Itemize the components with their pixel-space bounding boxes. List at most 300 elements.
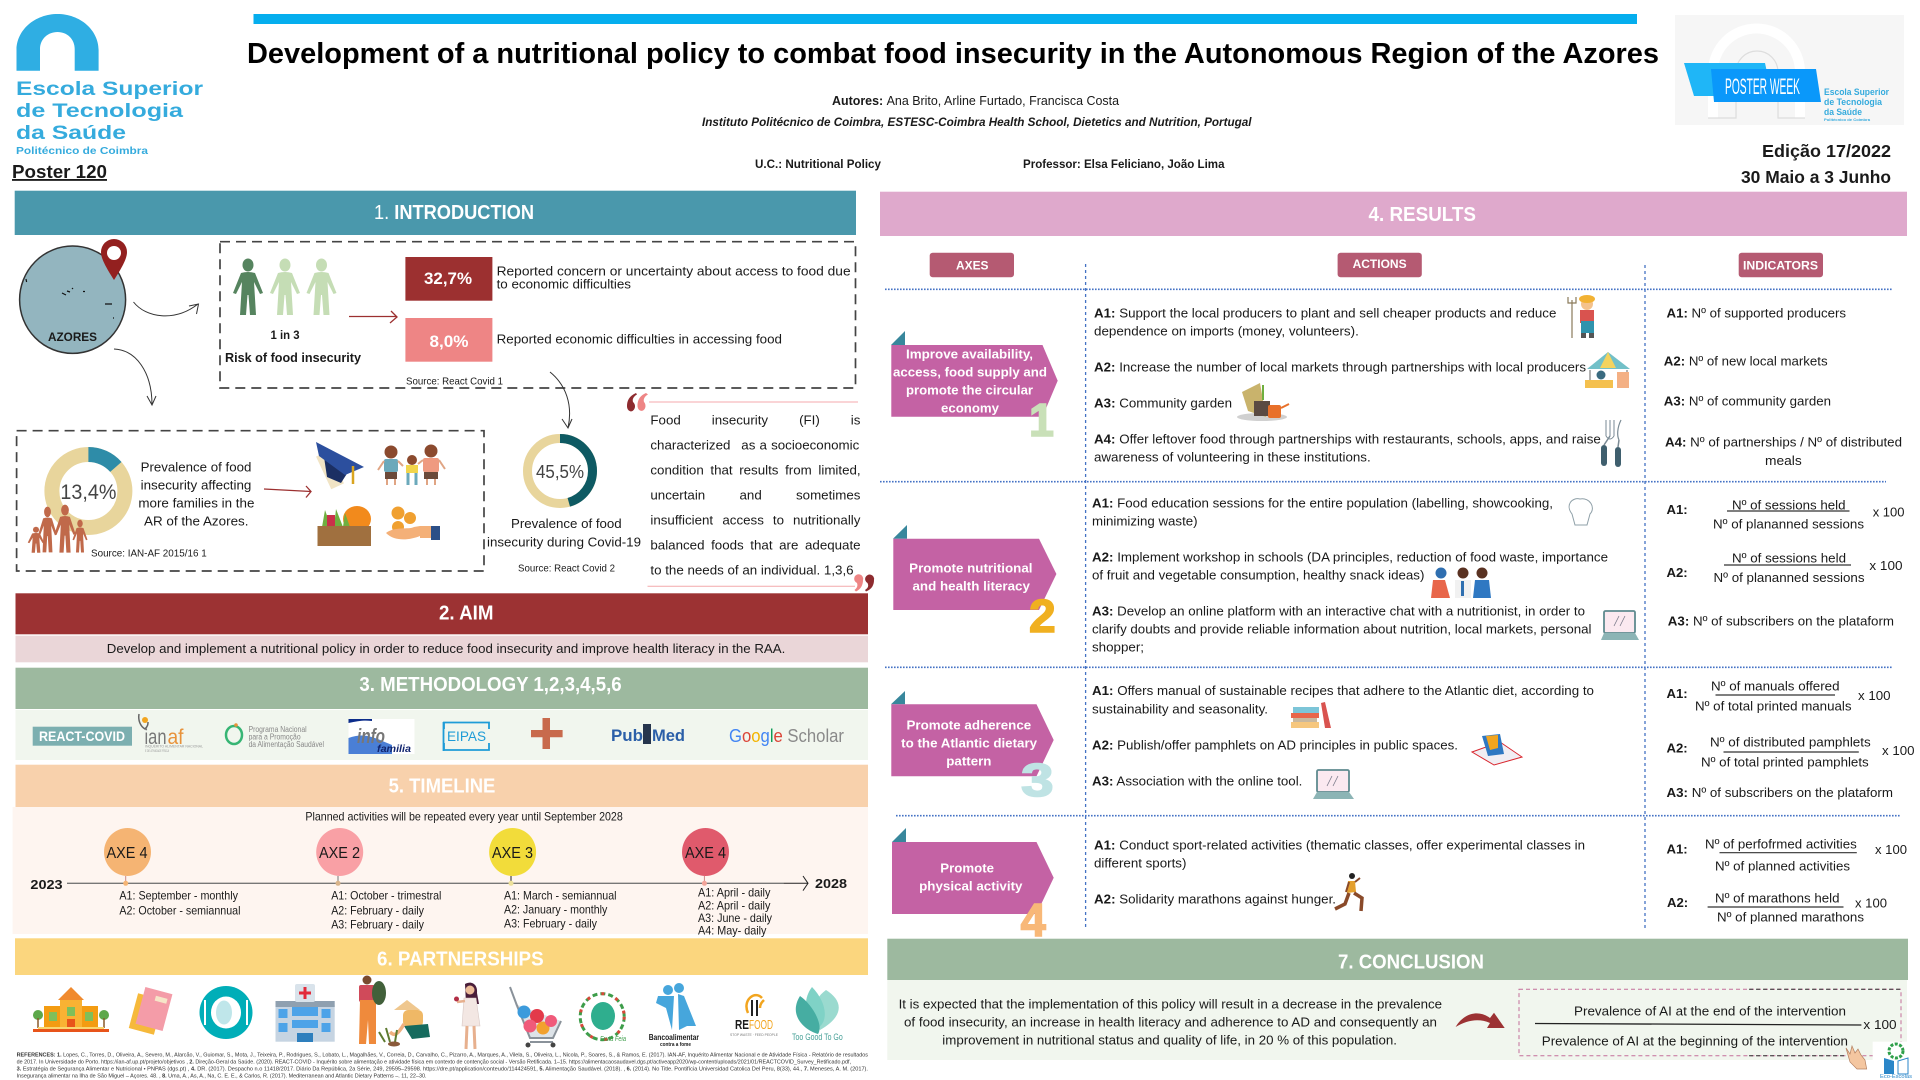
references: Insegurança alimentar na Ilha de São Miguel – Açores. 48. , 8. Uma, A., As, A., Na, C. E. E., & Carlos, R. (2017). Mediterranean and Atlantic Dietary Patterns –. 11, 22–30.: [17, 1073, 427, 1079]
source: Source: React Covid 2: [518, 562, 615, 574]
poster week logo: da Saúde: [1824, 107, 1862, 117]
logo: Refood: STOP WASTE · FEED PEOPLE: [730, 1032, 778, 1037]
heading: results: [880, 192, 1907, 236]
axis 3: [891, 691, 1054, 806]
milestone: AXE 4: [104, 828, 240, 918]
axis flag: [893, 525, 907, 539]
school logo: de Tecnologia: [16, 100, 183, 122]
axis flag: [892, 828, 906, 842]
panel: results: [880, 192, 1914, 946]
formula: activities: x 100: [1875, 842, 1907, 857]
formula: marathons: x 100: [1855, 896, 1887, 910]
donut: 45,5%: [528, 438, 592, 504]
axis label: Promote: [940, 860, 994, 876]
logo: national food programme: Programa Nacional: [249, 725, 307, 734]
aim statement: [16, 636, 868, 662]
quote: definition of food insecurity: uncertain: [650, 488, 705, 502]
quote: definition of food insecurity: condition: [650, 462, 704, 478]
milestone: AXE 3: [489, 828, 616, 930]
arrow: risk box to Covid donut: [550, 372, 572, 428]
formula: sessions A1: Nº of sessions held: [1732, 498, 1846, 512]
icon: nutritionist: [454, 983, 480, 1049]
icon: one in three people: [233, 258, 336, 315]
text: prevalence during Covid-19: Prevalence of food: [511, 516, 622, 531]
poster week logo: [1675, 15, 1904, 125]
authors: Autores: Ana Brito, Arline Furtado, Francisca Costa: [832, 94, 1119, 108]
quote: definition of food insecurity: balanced: [650, 538, 705, 552]
axis number: 2: [1029, 590, 1056, 642]
conclusion text: of food insecurity, an increase in health literacy and adherence to AD and consequently an: [904, 1014, 1437, 1030]
heading: aim: 2. AIM: [439, 602, 494, 624]
map of the Azores with pin: [20, 239, 127, 353]
axis 2 actions: A3: Develop an online platform with an interactive chat with a nutritionist, in order to: [1092, 604, 1585, 618]
indicators: A2: Nº of new local markets: [1664, 354, 1828, 368]
axis 4 actions: A2: Solidarity marathons against hunger.: [1094, 892, 1336, 906]
school logo: Politécnico de Coimbra: [16, 145, 148, 157]
quote: definition of food insecurity: nutritionally: [793, 512, 861, 528]
logo: Banco Alimentar: [649, 983, 699, 1048]
formula: pamphlets: Nº of total printed pamphlets: [1701, 754, 1869, 770]
text: prevalence during Covid-19: insecurity during Covid-19: [487, 534, 641, 550]
donut: 13,4%: [52, 454, 125, 528]
institution: Instituto Politécnico de Coimbra, ESTESC-Coimbra Health School, Dietetics and Nutrition, Portugal: [702, 115, 1252, 129]
panel: aim: [16, 593, 868, 662]
icon: children at workshop: [1431, 568, 1491, 598]
formula: pamphlets: x 100: [1882, 743, 1914, 758]
icon: market stall: [1585, 352, 1630, 388]
arrow: to formula: [1456, 1013, 1505, 1028]
panel: introduction: [15, 191, 874, 591]
quote: definition of food insecurity: characterized: [650, 438, 730, 452]
formula box: Prevalence of AI at the end of the intervention: [1574, 1004, 1846, 1018]
aim statement: Develop and implement a nutritional policy in order to reduce food insecurity and improve health literacy in the RAA.: [107, 641, 785, 656]
text: reported concern: Reported concern or uncertainty about access to food due: [497, 264, 851, 278]
axis label: [901, 718, 1038, 768]
one in three label: 1 in 3: [270, 330, 300, 342]
axis 2 actions: [1092, 496, 1639, 654]
axis 2 actions: of fruit and vegetable consumption, healthy snack ideas): [1092, 568, 1424, 582]
axis 3 actions: A1: Offers manual of sustainable recipes that adhere to the Atlantic diet, according to: [1092, 683, 1594, 698]
milestone: AXE 4: A2: October - semiannual: [119, 904, 240, 918]
axis 2 actions: A2: Implement workshop in schools (DA principles, reduction of food waste, importance: [1092, 550, 1608, 564]
axis number: 1: [1029, 394, 1054, 446]
axis 2: [893, 525, 1056, 642]
quote: definition of food insecurity: and: [740, 488, 762, 502]
text: prevalence affecting families: AR of the Azores.: [144, 514, 248, 528]
poster week logo: Politécnico de Coimbra: [1824, 117, 1871, 122]
axis arrow: [892, 842, 1054, 914]
timeline note: Planned activities will be repeated every year until September 2028: [305, 811, 623, 824]
axis 1 actions: dependence on imports (money, volunteers).: [1094, 324, 1359, 338]
dates: 30 Maio a 3 Junho: [1741, 167, 1891, 187]
conclusion text: improvement in nutritional status and quality of life, in 20 % of this population.: [942, 1032, 1397, 1048]
indicators: A3: Nº of community garden: [1664, 394, 1831, 408]
icon: runner: [1335, 873, 1362, 911]
timeline axis: 2023: [30, 877, 63, 892]
axis 2 actions: minimizing waste): [1092, 514, 1198, 528]
quote: definition of food insecurity: (FI): [799, 412, 820, 428]
timeline axis: 2028: [815, 876, 847, 891]
logo: ian-af: E DE ATIVIDADE FÍSICA: [145, 749, 169, 753]
icon: laptop: [1601, 611, 1639, 640]
logo: ian-af: INQUÉRITO ALIMENTAR NACIONAL: [145, 744, 203, 748]
logo: info familia: familia: [377, 744, 411, 755]
axis 3 actions: A3: Association with the online tool.: [1092, 774, 1302, 788]
quote: definition of food insecurity: limited,: [818, 462, 861, 478]
poster number: Poster 120: [12, 161, 107, 182]
heading: timeline: 5. TIMELINE: [389, 776, 495, 798]
quote: definition of food insecurity: socioeconomic: [771, 438, 860, 452]
formula: marathons: [1667, 890, 1887, 924]
edition: Edição 17/2022: [1762, 141, 1891, 161]
axis arrow: [891, 704, 1054, 776]
formula: sessions A2: Nº of plananned sessions: [1714, 570, 1865, 585]
milestone: AXE 2: A1: October - trimestral: [331, 890, 441, 902]
logo: Eco-Escolas: [1873, 1042, 1914, 1080]
axis number: 4: [1021, 894, 1046, 946]
donut: 13,4%: 13,4%: [60, 481, 116, 504]
panel: timeline: [13, 765, 868, 938]
heading: partnerships: 6. PARTNERSHIPS: [377, 948, 544, 970]
logo: Banco Alimentar: Bancoalimentar: [649, 1033, 699, 1042]
axis flag: [891, 331, 905, 345]
title: Development of a nutritional policy to combat food insecurity in the Autonomous Region of the Azores: [247, 38, 1659, 70]
text: prevalence during Covid-19: [487, 516, 641, 550]
axis 3 actions: [1092, 683, 1594, 799]
formula: sessions A1: [1666, 498, 1904, 532]
axis 1 actions: A3: Community garden: [1094, 396, 1232, 410]
red arrow: [264, 486, 311, 498]
dashed box: risk of food insecurity: [220, 242, 856, 388]
formula: activities: Nº of planned activities: [1715, 858, 1850, 874]
text: reported concern: to economic difficulties: [497, 276, 631, 292]
formula: manuals: A1:: [1666, 686, 1688, 701]
axis label: to the Atlantic dietary: [901, 736, 1038, 750]
poster week logo: de Tecnologia: [1824, 97, 1883, 107]
axis 4 actions: [1094, 838, 1585, 911]
poster week logo: Escola Superior: [1824, 87, 1889, 97]
milestone: AXE 4: AXE 4: [106, 845, 148, 862]
quote: definition of food insecurity: that: [750, 538, 773, 552]
formula: manuals: [1666, 678, 1891, 714]
logo: Refood: RE: [735, 1017, 749, 1032]
milestone: AXE 3: AXE 3: [492, 845, 533, 862]
formula: activities: [1666, 836, 1907, 874]
formula: manuals: x 100: [1858, 688, 1891, 703]
quote: definition of food insecurity: as: [741, 438, 756, 452]
column label: actions: [1338, 253, 1422, 277]
logo: REACT-COVID: REACT-COVID: [39, 728, 125, 744]
quote: definition of food insecurity: to: [773, 512, 784, 528]
icon: pointing hand: [1846, 1046, 1867, 1069]
axis label: Promote adherence: [906, 718, 1031, 732]
quote: definition of food insecurity: that: [710, 462, 733, 478]
icon: hospital: [276, 984, 335, 1042]
indicators: A4: Nº of partnerships / Nº of distributed: [1665, 434, 1902, 450]
milestone: AXE 4: A3: June - daily: [698, 912, 772, 925]
milestone: AXE 2: A3: February - daily: [331, 918, 424, 932]
axis label: Promote nutritional: [909, 560, 1032, 576]
icon: chef hat: [1569, 499, 1592, 525]
heading: conclusion: [887, 939, 1908, 980]
source: Source: IAN-AF 2015/16 1: [91, 548, 207, 560]
icon: pamphlet: [1472, 734, 1522, 765]
panel: methodology: [16, 668, 868, 760]
column label: actions: ACTIONS: [1353, 257, 1407, 271]
formula: marathons: Nº of marathons held: [1715, 890, 1840, 906]
axis arrow: [893, 539, 1056, 610]
quote: definition of food insecurity: [627, 393, 874, 592]
arrow: map to prevalence box: [114, 349, 156, 405]
milestone: AXE 2: AXE 2: [319, 845, 360, 862]
stat: 8,0%: 8,0%: [430, 332, 468, 351]
icon: closing quote mark: [854, 574, 874, 592]
heading: introduction: [15, 191, 856, 235]
references: REFERENCES: 1. Lopes, C., Torres, D., Oliveira, A., Severo, M., Alarcão, V., Guiomar, S., Mota, J., Teixeira, P., Rodrigues, S., Lobato, L., Magalhães, V., Correia, D., Carvalho, C., Pizarro, A., Marques, A., Vilela, S., Oliveira, L., Nicola, P., Soares, S., & Ramos, E. (2017). IAN-AF, Inquérito Alimentar Nacional e de Atividade Física - Relatório de resultados: [17, 1052, 868, 1058]
references: de 2017. In Universidade do Porto. https://ian-af.up.pt/projeto/objetivos , 2. Direção-Geral da Saúde. (2020). REACT-COVID - Inquérito sobre alimentação e atividade física em contexto de contenção social - Versão Retificada. 1–15. https://alimentacaosaudavel.dgs.pt/activeapp2020/wp-content/uploads/2021/01/REACTCOVID_Survey_Retificado.pdf,: [17, 1059, 851, 1065]
icon: opening quote mark: [627, 393, 648, 411]
icon: shopping cart: [510, 987, 561, 1048]
logo: Refood: FOOD: [749, 1017, 773, 1032]
logo: PubMed: Pub: [611, 726, 643, 745]
quote: definition of food insecurity: from: [785, 462, 812, 478]
course unit: U.C.: Nutritional Policy: [755, 157, 881, 171]
heading: timeline: [16, 765, 868, 807]
timeline axis: [30, 876, 847, 892]
axis 3 actions: A2: Publish/offer pamphlets on AD principles in public spaces.: [1092, 738, 1458, 752]
quote: definition of food insecurity: to the needs of an individual. 1,3,6: [650, 562, 854, 578]
formula: sessions A2: Nº of sessions held: [1732, 550, 1846, 566]
axis 2 actions: shopper;: [1092, 640, 1144, 654]
school logo: [16, 14, 204, 157]
formula: activities: A1:: [1666, 842, 1688, 856]
axis label: [919, 860, 1023, 894]
logo: Too Good To Go: Too Good To Go: [792, 1032, 843, 1043]
logo: EIPAS: [444, 722, 489, 751]
arrow: map to risk box: [134, 302, 198, 316]
axis 1: [891, 331, 1058, 446]
logo: info familia: [348, 719, 414, 755]
source: Source: React Covid 1: [406, 376, 503, 388]
quote: definition of food insecurity: adequate: [805, 538, 861, 552]
text: prevalence affecting families: more families in the: [138, 496, 254, 510]
map of the Azores with pin: AZORES: [48, 330, 97, 344]
risk label: Risk of food insecurity: [225, 350, 362, 365]
logo: Google Scholar: Google Scholar: [729, 726, 844, 746]
conclusion background: [887, 980, 1907, 1060]
quote: definition of food insecurity: Food: [650, 412, 681, 428]
icon: community garden: [1237, 383, 1289, 421]
axis 4: [892, 828, 1054, 946]
formula: pamphlets: [1666, 734, 1914, 770]
stat: 32,7%: 32,7%: [424, 269, 472, 288]
axis label: [909, 560, 1032, 594]
axis label: physical activity: [919, 878, 1023, 894]
references: 3. Estratégia de Segurança Alimentar e Nutricional • PNPAS (dgs.pt) , 4. DR. (2017). Despacho n.o 11418/2017. Diário Da República, 2a Série, 249, 29595–29598. https://dre.pt/application/conteudo/114424591, 5. Alimentação Saudável. (2018). , 6. (2014). No Title. Pontifícia Universidad Catolica Del Peru, 8(33), 44., 7. Meneses, A. M. (2017).: [17, 1066, 868, 1072]
school logo: da Saúde: [16, 122, 126, 144]
logo: ian-af: [139, 714, 203, 753]
logos band: [16, 710, 868, 760]
panel: partnerships: [15, 938, 868, 1049]
quote: definition of food insecurity: sometimes: [796, 488, 861, 502]
quote: definition of food insecurity: a: [760, 438, 768, 452]
formula: activities: Nº of perfofrmed activities: [1705, 836, 1857, 852]
heading: aim: [16, 593, 868, 634]
axis arrow: [891, 345, 1058, 417]
axis label: economy: [941, 400, 1000, 416]
school logo: Escola Superior: [16, 78, 204, 100]
formula: manuals: Nº of total printed manuals: [1695, 698, 1852, 714]
logo: Eco-Escolas: Eco-Escolas: [1880, 1074, 1912, 1080]
axis label: and health literacy: [912, 578, 1030, 594]
indicators: A3: Nº of subscribers on the plataform: [1668, 614, 1894, 628]
logo: EIPAS: EIPAS: [447, 728, 486, 744]
heading: conclusion: 7. CONCLUSION: [1338, 952, 1484, 974]
indicators: [1664, 306, 1914, 924]
milestone: AXE 2: A2: February - daily: [331, 904, 424, 918]
formula: marathons: Nº of planned marathons: [1717, 910, 1864, 924]
formula: sessions A1: x 100: [1873, 504, 1904, 520]
timeline background: [13, 807, 868, 934]
axis 3 actions: sustainability and seasonality.: [1092, 702, 1268, 716]
axis 2 actions: clarify doubts and provide reliable information about nutrition, local markets, personal: [1092, 622, 1592, 636]
logo: ian-af: ian: [144, 726, 166, 749]
formula: sessions A2: A2:: [1666, 565, 1688, 580]
formula box: [1519, 989, 1901, 1056]
icon: children: [378, 444, 445, 485]
milestone: AXE 3: A3: February - daily: [504, 918, 597, 930]
milestone: AXE 4: AXE 4: [685, 845, 726, 862]
milestone: AXE 4: A1: September - monthly: [119, 890, 238, 902]
logo: Refood: [730, 995, 778, 1037]
text: reported concern: [497, 264, 851, 292]
icon: cutlery: [1601, 420, 1621, 467]
icon: school: [33, 987, 109, 1032]
conclusion text: [899, 996, 1442, 1048]
logo: Banco Alimentar: contra a fome: [660, 1042, 691, 1048]
quote: definition of food insecurity: access: [722, 512, 764, 528]
formula: sessions A1: A1:: [1666, 502, 1688, 517]
axis 1 actions: A2: Increase the number of local markets through partnerships with local producers: [1094, 360, 1586, 374]
indicators: A3: Nº of subscribers on the plataform: [1666, 785, 1893, 800]
formula: marathons: A2:: [1667, 895, 1688, 910]
top blue bar: [254, 14, 1637, 24]
axis label: promote the circular: [906, 382, 1033, 398]
logo: ian-af: af: [168, 726, 184, 749]
logo: Fruta Feia: [580, 994, 626, 1043]
donut: 45,5%: 45,5%: [536, 461, 584, 482]
icon: books: [1291, 702, 1331, 728]
professor: Professor: Elsa Feliciano, João Lima: [1023, 157, 1225, 171]
icon: notebooks: [129, 987, 172, 1035]
column label: axes: [930, 253, 1014, 277]
icon: vegetable basket: [318, 506, 371, 546]
icon: coins and hand: [386, 506, 440, 540]
stat: 32,7%: [405, 257, 492, 301]
quote: definition of food insecurity: insufficient: [650, 512, 713, 528]
milestone: AXE 4: A2: April - daily: [698, 900, 771, 912]
quote: definition of food insecurity: results: [739, 462, 779, 478]
milestone: AXE 3: A2: January - monthly: [504, 904, 607, 916]
axis 4 actions: A1: Conduct sport-related activities (thematic classes, offer experimental classes in: [1094, 838, 1585, 852]
logo: PubMed: [611, 724, 685, 745]
axis 4 actions: different sports): [1094, 856, 1186, 870]
logo: national food programme: para a Promoção: [249, 732, 301, 742]
axis label: [893, 346, 1047, 416]
column label: indicators: [1739, 253, 1823, 277]
icon: graduation cap: [316, 442, 364, 489]
dashed box: prevalence affecting families: [17, 431, 484, 571]
formula box: Prevalence of AI at the beginning of the intervention: [1542, 1034, 1848, 1048]
logo: info familia: info: [357, 726, 385, 748]
icon: family silhouette: [28, 505, 88, 553]
quote: definition of food insecurity: is: [851, 412, 861, 428]
logo: Fruta Feia: Fruta Feia: [600, 1036, 626, 1043]
axis 1 actions: awareness of volunteering in these institutions.: [1094, 450, 1371, 464]
axis label: access, food supply and: [893, 364, 1047, 380]
icon: farmer: [1568, 295, 1595, 338]
formula: sessions A2: x 100: [1869, 558, 1902, 573]
quote: definition of food insecurity: foods: [711, 538, 744, 552]
panel: conclusion: [887, 939, 1914, 1080]
milestone: AXE 4: A1: April - daily: [698, 886, 771, 900]
milestone: AXE 2: [316, 828, 441, 932]
poster week logo: POSTER WEEK: [1725, 74, 1800, 99]
icon: plate: [200, 986, 252, 1039]
axis flag: [891, 691, 905, 704]
axis 1 actions: [1094, 295, 1630, 467]
milestone: AXE 3: A1: March - semiannual: [504, 890, 616, 902]
axis label: Improve availability,: [906, 346, 1033, 362]
axis 1 actions: A1: Support the local producers to plant and sell cheaper products and reduce: [1094, 306, 1556, 320]
icon: farmers: [359, 976, 430, 1046]
stat: 8,0%: [405, 318, 492, 362]
formula: pamphlets: Nº of distributed pamphlets: [1710, 734, 1871, 750]
indicators: meals: [1765, 453, 1802, 468]
references: [17, 1052, 868, 1079]
axis label: pattern: [946, 754, 991, 768]
conclusion text: It is expected that the implementation of this policy will result in a decrease in the prevalence: [899, 996, 1442, 1012]
heading: introduction: 1. INTRODUCTION: [374, 202, 534, 224]
logo: PubMed: Med: [652, 726, 685, 745]
logo: Too Good To Go: [792, 987, 843, 1043]
formula: sessions A2: [1666, 550, 1902, 585]
column label: indicators: INDICATORS: [1743, 258, 1818, 272]
axis 1 actions: A4: Offer leftover food through partnerships with restaurants, schools, apps, and raise: [1094, 432, 1601, 446]
heading: results: 4. RESULTS: [1368, 204, 1476, 226]
column label: axes: AXES: [956, 258, 988, 272]
text: prevalence affecting families: Prevalence of food: [141, 460, 251, 474]
formula box: x 100: [1863, 1017, 1897, 1032]
heading: methodology: [16, 668, 868, 709]
formula: sessions A1: Nº of plananned sessions: [1713, 516, 1864, 532]
indicators: A1: Nº of supported producers: [1666, 306, 1846, 320]
heading: partnerships: [15, 938, 868, 975]
axis number: 3: [1021, 754, 1054, 806]
text: prevalence affecting families: [138, 460, 254, 528]
axis 2 actions: A1: Food education sessions for the entire population (labelling, showcooking,: [1092, 496, 1553, 510]
red arrow: [349, 311, 397, 323]
quote: definition of food insecurity: insecurity: [712, 412, 768, 428]
logo: red cross: [531, 718, 563, 749]
formula: manuals: Nº of manuals offered: [1711, 678, 1840, 694]
text: reported difficulties: Reported economic difficulties in accessing food: [497, 332, 782, 346]
text: prevalence affecting families: insecurity affecting: [141, 478, 251, 492]
logo: national food programme: da Alimentação Saudável: [249, 740, 324, 749]
logo: national food programme: [226, 723, 324, 749]
milestone: AXE 4: [682, 828, 772, 938]
header: [12, 14, 1904, 187]
